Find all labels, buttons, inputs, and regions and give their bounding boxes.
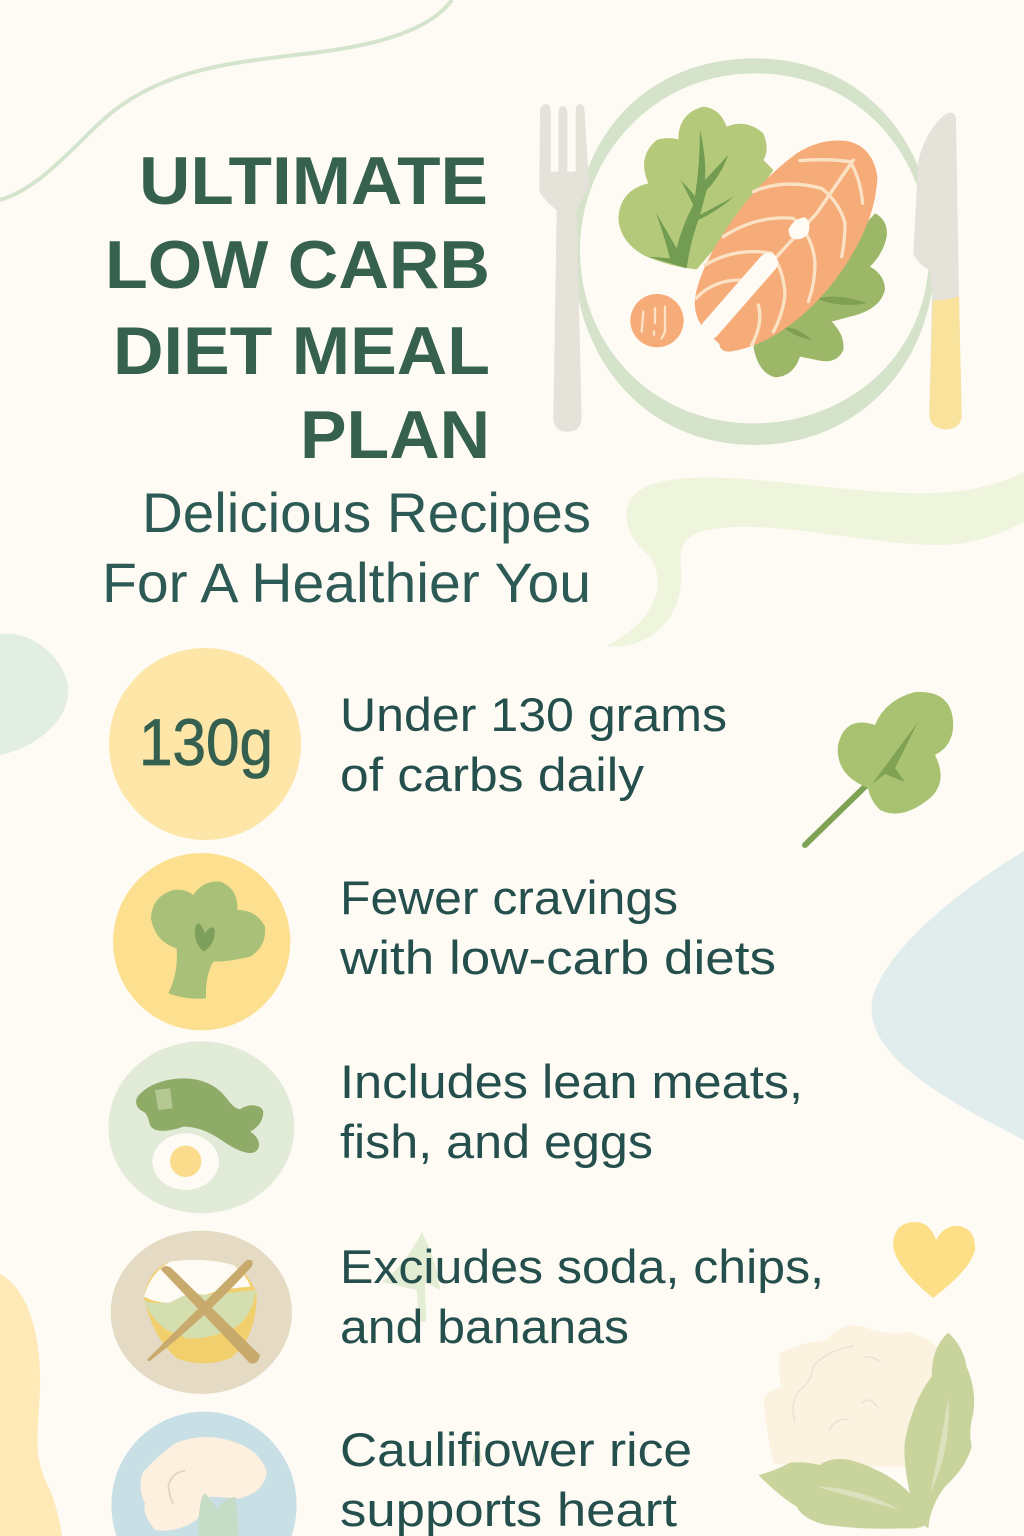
icon: spinach leaf: [805, 692, 953, 845]
plate rim: [573, 58, 935, 445]
icon: excluded foods badge: [111, 1231, 292, 1394]
icon: broccoli badge: [113, 853, 290, 1030]
knife handle: [929, 296, 962, 429]
egg white: [152, 1133, 219, 1190]
text: lean meats: fish, and eggs: [340, 1115, 653, 1168]
text: excluded foods: [340, 1240, 824, 1353]
plate center: [580, 73, 929, 423]
salmon fat lines: [696, 160, 863, 345]
text: lean meats: Includes lean meats,: [340, 1055, 803, 1108]
background decoration: top curve: [0, 0, 452, 200]
text: excluded foods: Exciudes soda, chips,: [340, 1240, 824, 1293]
icon: fish and egg badge: [108, 1041, 294, 1213]
background decoration: bottom-left yellow blob: [0, 1274, 62, 1536]
fork: [539, 104, 589, 432]
text: fewer cravings: Fewer cravings: [340, 871, 678, 924]
background decoration: ribbon: [606, 472, 1024, 647]
text: cauliflower rice: Caulifiower rice: [340, 1423, 692, 1476]
knife: [913, 113, 962, 429]
icon: yellow heart: [893, 1222, 975, 1298]
left leaf: [758, 1459, 930, 1529]
illustration: plate with salmon, leaves and cutlery: [539, 58, 962, 445]
back leaf veins: [783, 297, 867, 340]
cauliflower head: [763, 1326, 940, 1467]
text: carbs limit: of carbs daily: [340, 748, 645, 801]
title: [105, 143, 490, 473]
subtitle: Delicious Recipes: [142, 481, 591, 544]
text: lean meats: [340, 1055, 803, 1168]
salmon steak: [695, 141, 877, 352]
subtitle: [102, 481, 591, 614]
front leaf vein: [648, 130, 734, 268]
bowl: [144, 1260, 257, 1363]
text: cauliflower rice: supports heart: [340, 1483, 677, 1536]
cauliflower curls: [793, 1346, 880, 1430]
leaf veins: [817, 1398, 949, 1510]
title: LOW CARB: [105, 227, 490, 303]
text: excluded foods: and bananas: [340, 1300, 629, 1353]
text: carbs limit: [340, 688, 727, 801]
background decoration: right blue blob: [871, 851, 1024, 1140]
round detail lines: [642, 307, 665, 338]
icon: 130g badge: [109, 648, 301, 840]
cross sticks: [147, 1260, 253, 1361]
salmon lemon round: [630, 294, 684, 347]
text: fewer cravings: with low-carb diets: [339, 931, 776, 984]
back leaf: [753, 213, 887, 377]
faint sprig behind text: [472, 1432, 482, 1462]
text: fewer cravings: [339, 871, 776, 984]
fish: [136, 1078, 263, 1153]
title: ULTIMATE: [139, 143, 488, 219]
text: cauliflower rice: [340, 1423, 692, 1536]
broccoli: [151, 881, 265, 999]
bowl top white: [144, 1260, 251, 1303]
front leaf: [618, 107, 773, 269]
text: carbs limit: Under 130 grams: [340, 688, 727, 741]
illustration: cauliflower with leaves: [758, 1326, 974, 1529]
icon: 130g badge: 130g: [139, 705, 273, 779]
icon: cauliflower badge: [111, 1412, 297, 1536]
cauliflower stalk: [198, 1493, 238, 1536]
bowl greens: [144, 1290, 256, 1339]
right leaf: [904, 1333, 974, 1528]
subtitle: For A Healthier You: [102, 551, 591, 614]
cauliflower curl: [168, 1471, 185, 1503]
broccoli center: [195, 924, 215, 952]
title: DIET MEAL: [113, 313, 490, 389]
background decoration: left green blob: [0, 634, 68, 755]
egg yolk: [170, 1146, 201, 1177]
cauliflower head: [140, 1437, 267, 1531]
title: PLAN: [300, 397, 490, 473]
faint leaf behind text: [382, 1232, 440, 1322]
salmon marrow: [788, 217, 809, 239]
fish gill: [155, 1088, 173, 1110]
salmon bone: [710, 263, 768, 329]
